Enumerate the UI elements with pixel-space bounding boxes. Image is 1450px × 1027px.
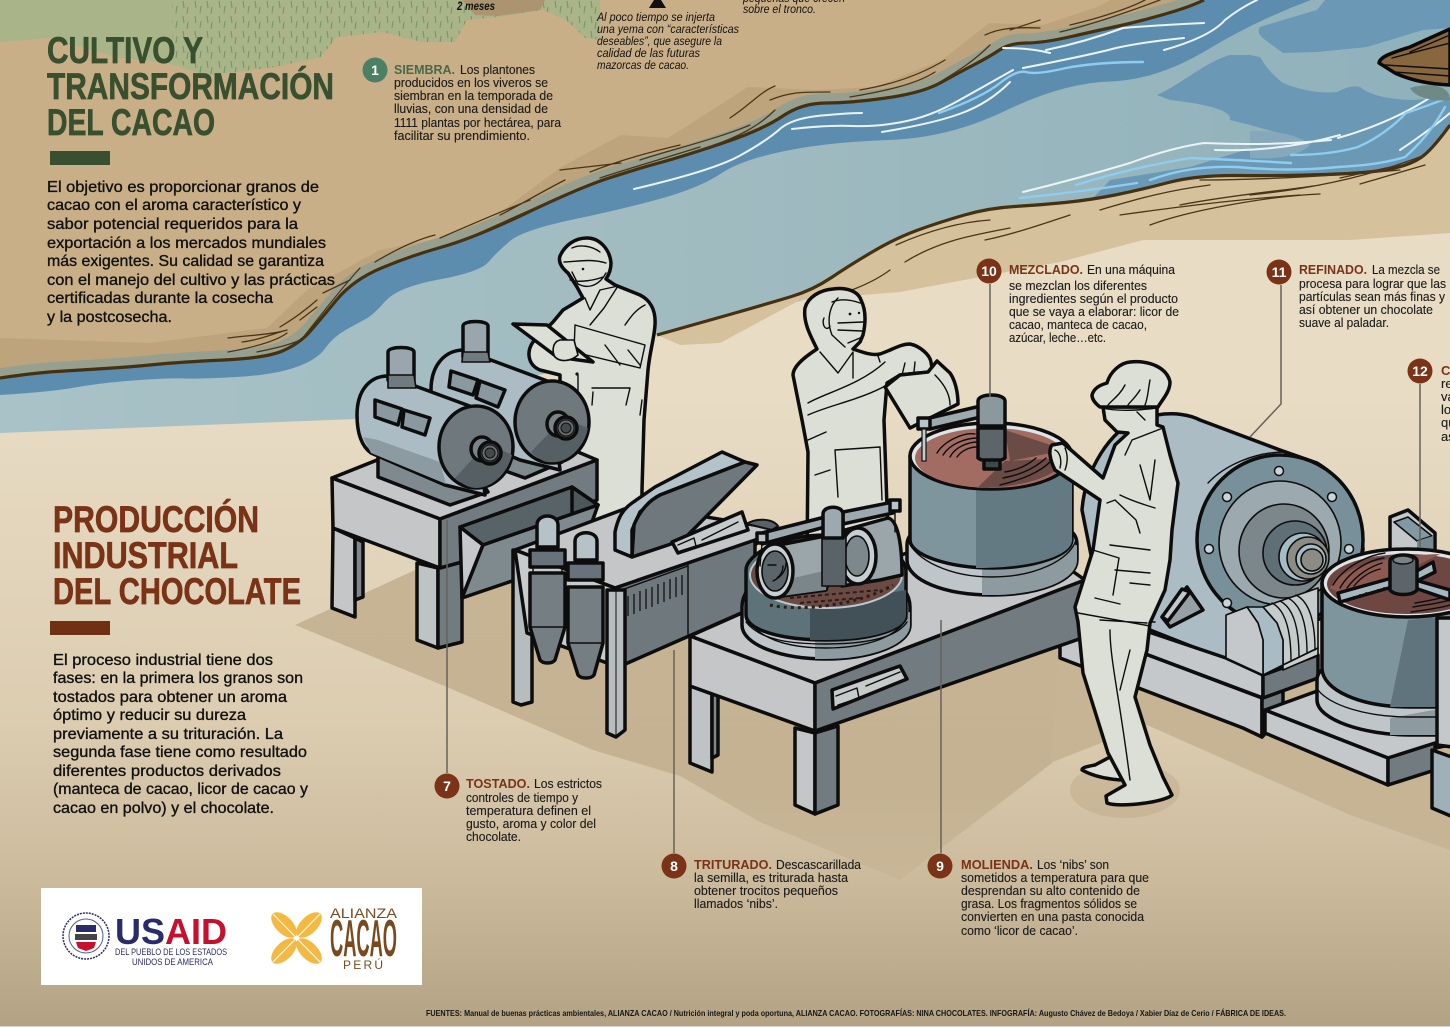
step 10: mezclado: MEZCLADO. [1009, 262, 1083, 277]
step 9: molienda: convierten en una pasta conocida [961, 909, 1145, 924]
text: cultivation intro: cacao con el aroma característico y [47, 197, 301, 214]
step 10: mezclado: se mezclan los diferentes [1009, 278, 1147, 293]
step 8: triturado: obtener trocitos pequeños [694, 883, 838, 898]
text: industrial intro: previamente a su trituración. La [53, 726, 283, 743]
step 1: siembra: 1111 plantas por hectárea, para [394, 115, 562, 130]
logo: USAID wordmark: AID [165, 911, 227, 952]
callout line 8 [673, 650, 675, 853]
label: 2 meses: 2 meses [456, 1, 495, 13]
text: CACAO [330, 910, 397, 968]
title: cultivo y transformación: CULTIVO Y [47, 30, 203, 71]
step 7: tostado: gusto, aroma y color del [466, 816, 596, 831]
mixer vat [907, 395, 1077, 595]
step 12 [1408, 358, 1450, 444]
roasting table [332, 415, 598, 648]
callout line 7 [446, 520, 448, 773]
hopper chute [615, 452, 757, 557]
text: grafting note: Al poco tiempo se injerta [596, 12, 715, 24]
logo: Alianza Cacao wordmark: ALIANZA [330, 905, 398, 921]
step 9: molienda: 9 [936, 858, 944, 874]
grass field [0, 0, 600, 76]
small box behind conche [1390, 510, 1435, 560]
step 7: tostado: 7 [443, 778, 451, 794]
step 9: molienda: desprendan su alto contenido de [961, 883, 1140, 898]
river: deep channel [0, 0, 1311, 395]
logo: USAID wordmark [115, 911, 227, 967]
text: cultivation intro: sabor potencial requeridos para la [47, 216, 298, 233]
roaster: front drum [357, 348, 513, 505]
text: industrial intro: tostados para obtener un aroma [53, 689, 287, 706]
stone grinder bowl [742, 535, 910, 659]
title: cultivo y transformación: DEL CACAO [47, 102, 215, 143]
step 7: tostado: TOSTADO. [466, 776, 530, 791]
worker with clipboard [513, 238, 655, 530]
callout line 9 [940, 620, 942, 853]
grinder rollers [757, 500, 902, 598]
title: producción industrial: DEL CHOCOLATE [53, 571, 301, 612]
text: cultivation intro: más exigentes. Su calidad se garantiza [47, 253, 324, 270]
step 8: triturado: Descascarillada [776, 857, 862, 872]
title: cultivo y transformación [47, 30, 334, 143]
text: pruning note [742, 0, 845, 16]
cyclone filters [530, 516, 603, 678]
crushing table [513, 505, 778, 737]
step 1: siembra: Los plantones [460, 62, 535, 77]
step 10: mezclado: 10 [981, 263, 997, 279]
land: upper bank [0, 0, 1204, 378]
logo: USAID wordmark: UNIDOS DE AMERICA [132, 957, 213, 967]
step 9: molienda [928, 854, 1149, 938]
text: grafting note: deseables”, que asegure la [597, 36, 722, 48]
logo panel [41, 888, 422, 985]
text: industrial intro: El proceso industrial tiene dos [53, 652, 273, 669]
step 7: tostado: Los estrictos [534, 776, 602, 791]
step 7: tostado: chocolate. [466, 829, 521, 844]
step 11: refinado: así obtener un chocolate [1299, 302, 1433, 317]
logo: USAID seal [63, 913, 109, 959]
text: cultivation intro: certificadas durante la cosecha [47, 290, 273, 307]
step 10: mezclado: que se vaya a elaborar: licor de [1009, 304, 1179, 319]
step 11: refinado: La mezcla se [1372, 262, 1440, 277]
heading accent bar: brown [50, 621, 110, 635]
river: dark blotches right [1080, 0, 1450, 212]
callout line 11 [1250, 285, 1281, 437]
worker pouring [793, 288, 958, 560]
river light patch [1250, 131, 1310, 158]
step 9: molienda: sometidos a temperatura para que [961, 870, 1149, 885]
step 9: molienda: Los ‘nibs’ son [1037, 857, 1109, 872]
logo: Alianza Cacao cross of pods [267, 908, 326, 968]
step 9: molienda: como ‘licor de cacao’. [961, 923, 1078, 938]
text: grafting note [596, 12, 739, 72]
step 11: refinado: suave al paladar. [1299, 315, 1389, 330]
river water [0, 0, 1450, 433]
floor shadow [295, 545, 1060, 880]
step 10: mezclado [976, 258, 1179, 345]
step 8: triturado [662, 854, 862, 911]
text: industrial intro: diferentes productos derivados [53, 763, 281, 780]
title: producción industrial: PRODUCCIÓN [53, 498, 259, 540]
floor shadow right [1050, 640, 1450, 850]
step 10: mezclado: En una máquina [1087, 262, 1176, 277]
text: grafting note: una yema con “características [597, 24, 739, 36]
step 11: refinado: 11 [1272, 264, 1287, 280]
text: cultivation intro: con el manejo del cultivo y las prácticas [47, 272, 335, 289]
land: darker bank strip [0, 0, 1204, 378]
step 10: mezclado: cacao, manteca de cacao, [1009, 317, 1147, 332]
text: industrial intro: fases: en la primera los granos son [53, 670, 303, 687]
step 7: tostado: controles de tiempo y [466, 790, 578, 805]
text: industrial intro: segunda fase tiene como resultado [53, 744, 307, 761]
text: grafting note: calidad de las futuras [597, 48, 700, 60]
text: industrial intro: óptimo y reducir su dureza [53, 707, 246, 724]
step 1: siembra: SIEMBRA. [394, 62, 455, 77]
mixer table right slab [1265, 690, 1450, 785]
text: industrial intro: cacao en polvo) y el chocolate. [53, 800, 274, 817]
step 8: triturado: la semilla, es triturada hasta [694, 870, 849, 885]
step 1: siembra: lluvias, con una densidad de [394, 101, 548, 116]
logo: USAID wordmark: US [115, 911, 165, 952]
step 10: mezclado: azúcar, leche…etc. [1009, 330, 1106, 345]
logo: Alianza Cacao wordmark: PERÚ [343, 957, 383, 972]
roaster: rear drum [431, 322, 589, 478]
step 8: triturado: 8 [670, 858, 678, 874]
step 12: 12 [1412, 363, 1428, 379]
title: producción industrial: INDUSTRIAL [53, 535, 238, 576]
step 9: molienda: grasa. Los fragmentos sólidos se [961, 896, 1137, 911]
boat [1379, 29, 1450, 100]
step 1: siembra: 1 [371, 62, 379, 78]
step 11: refinado [1266, 260, 1446, 330]
worker inspecting [1050, 362, 1178, 805]
step 10: mezclado: ingredientes según el producto [1009, 291, 1178, 306]
text: grafting note: mazorcas de cacao. [597, 60, 689, 72]
text: industrial intro: (manteca de cacao, licor de cacao y [53, 781, 308, 798]
refiner machine [1060, 414, 1363, 737]
step 7: tostado [434, 774, 602, 844]
text: cultivation intro: y la postcosecha. [47, 309, 172, 326]
step 8: triturado: llamados ‘nibs’. [694, 896, 778, 911]
step 1: siembra [362, 58, 562, 143]
conche vat [1317, 549, 1450, 735]
step 11: refinado: REFINADO. [1299, 262, 1367, 277]
text: pruning note: sobre el tronco. [743, 4, 816, 16]
text: cultivation intro: exportación a los mercados mundiales [47, 235, 326, 252]
step 9: molienda: MOLIENDA. [961, 857, 1033, 872]
foot shadow [1070, 762, 1180, 818]
front-right cabinet [1432, 618, 1450, 820]
text: cultivation intro: El objetivo es proporcionar granos de [47, 179, 319, 196]
step 1: siembra: siembran en la temporada de [394, 88, 553, 103]
text: cultivation intro [47, 179, 335, 326]
step 1: siembra: producidos en los viveros se [394, 75, 548, 90]
title: cultivo y transformación: TRANSFORMACIÓN [47, 65, 334, 107]
milling table [690, 520, 1085, 814]
step 8: triturado: TRITURADO. [694, 857, 772, 872]
river current lines [634, 0, 1450, 198]
callout line 12 [1419, 384, 1421, 548]
title: producción industrial [53, 498, 301, 612]
logo: USAID wordmark: DEL PUEBLO DE LOS ESTADOS [115, 947, 227, 957]
icon: small triangle marker [649, 0, 666, 8]
sources footer: FUENTES: Manual de buenas prácticas ambientales, ALIANZA CACAO / Nutrición integral y poda oportuna, ALIANZA CACAO. FOTOGRAFÍAS: NINA CHOCOLATES. INFOGRAFÍA: Augusto Chávez de Bedoya / Xabier Díaz de Cerio / FÁBRICA DE IDEAS. [426, 1008, 1286, 1018]
text: industrial intro [53, 652, 308, 817]
river banks ink [0, 0, 1450, 378]
heading accent bar: green [50, 151, 110, 165]
callout line 10 [989, 284, 991, 397]
beach [657, 125, 1450, 345]
step 7: tostado: temperatura definen el [466, 803, 591, 818]
logo: Alianza Cacao wordmark [330, 905, 398, 972]
step 1: siembra: facilitar su prendimiento. [394, 128, 530, 143]
